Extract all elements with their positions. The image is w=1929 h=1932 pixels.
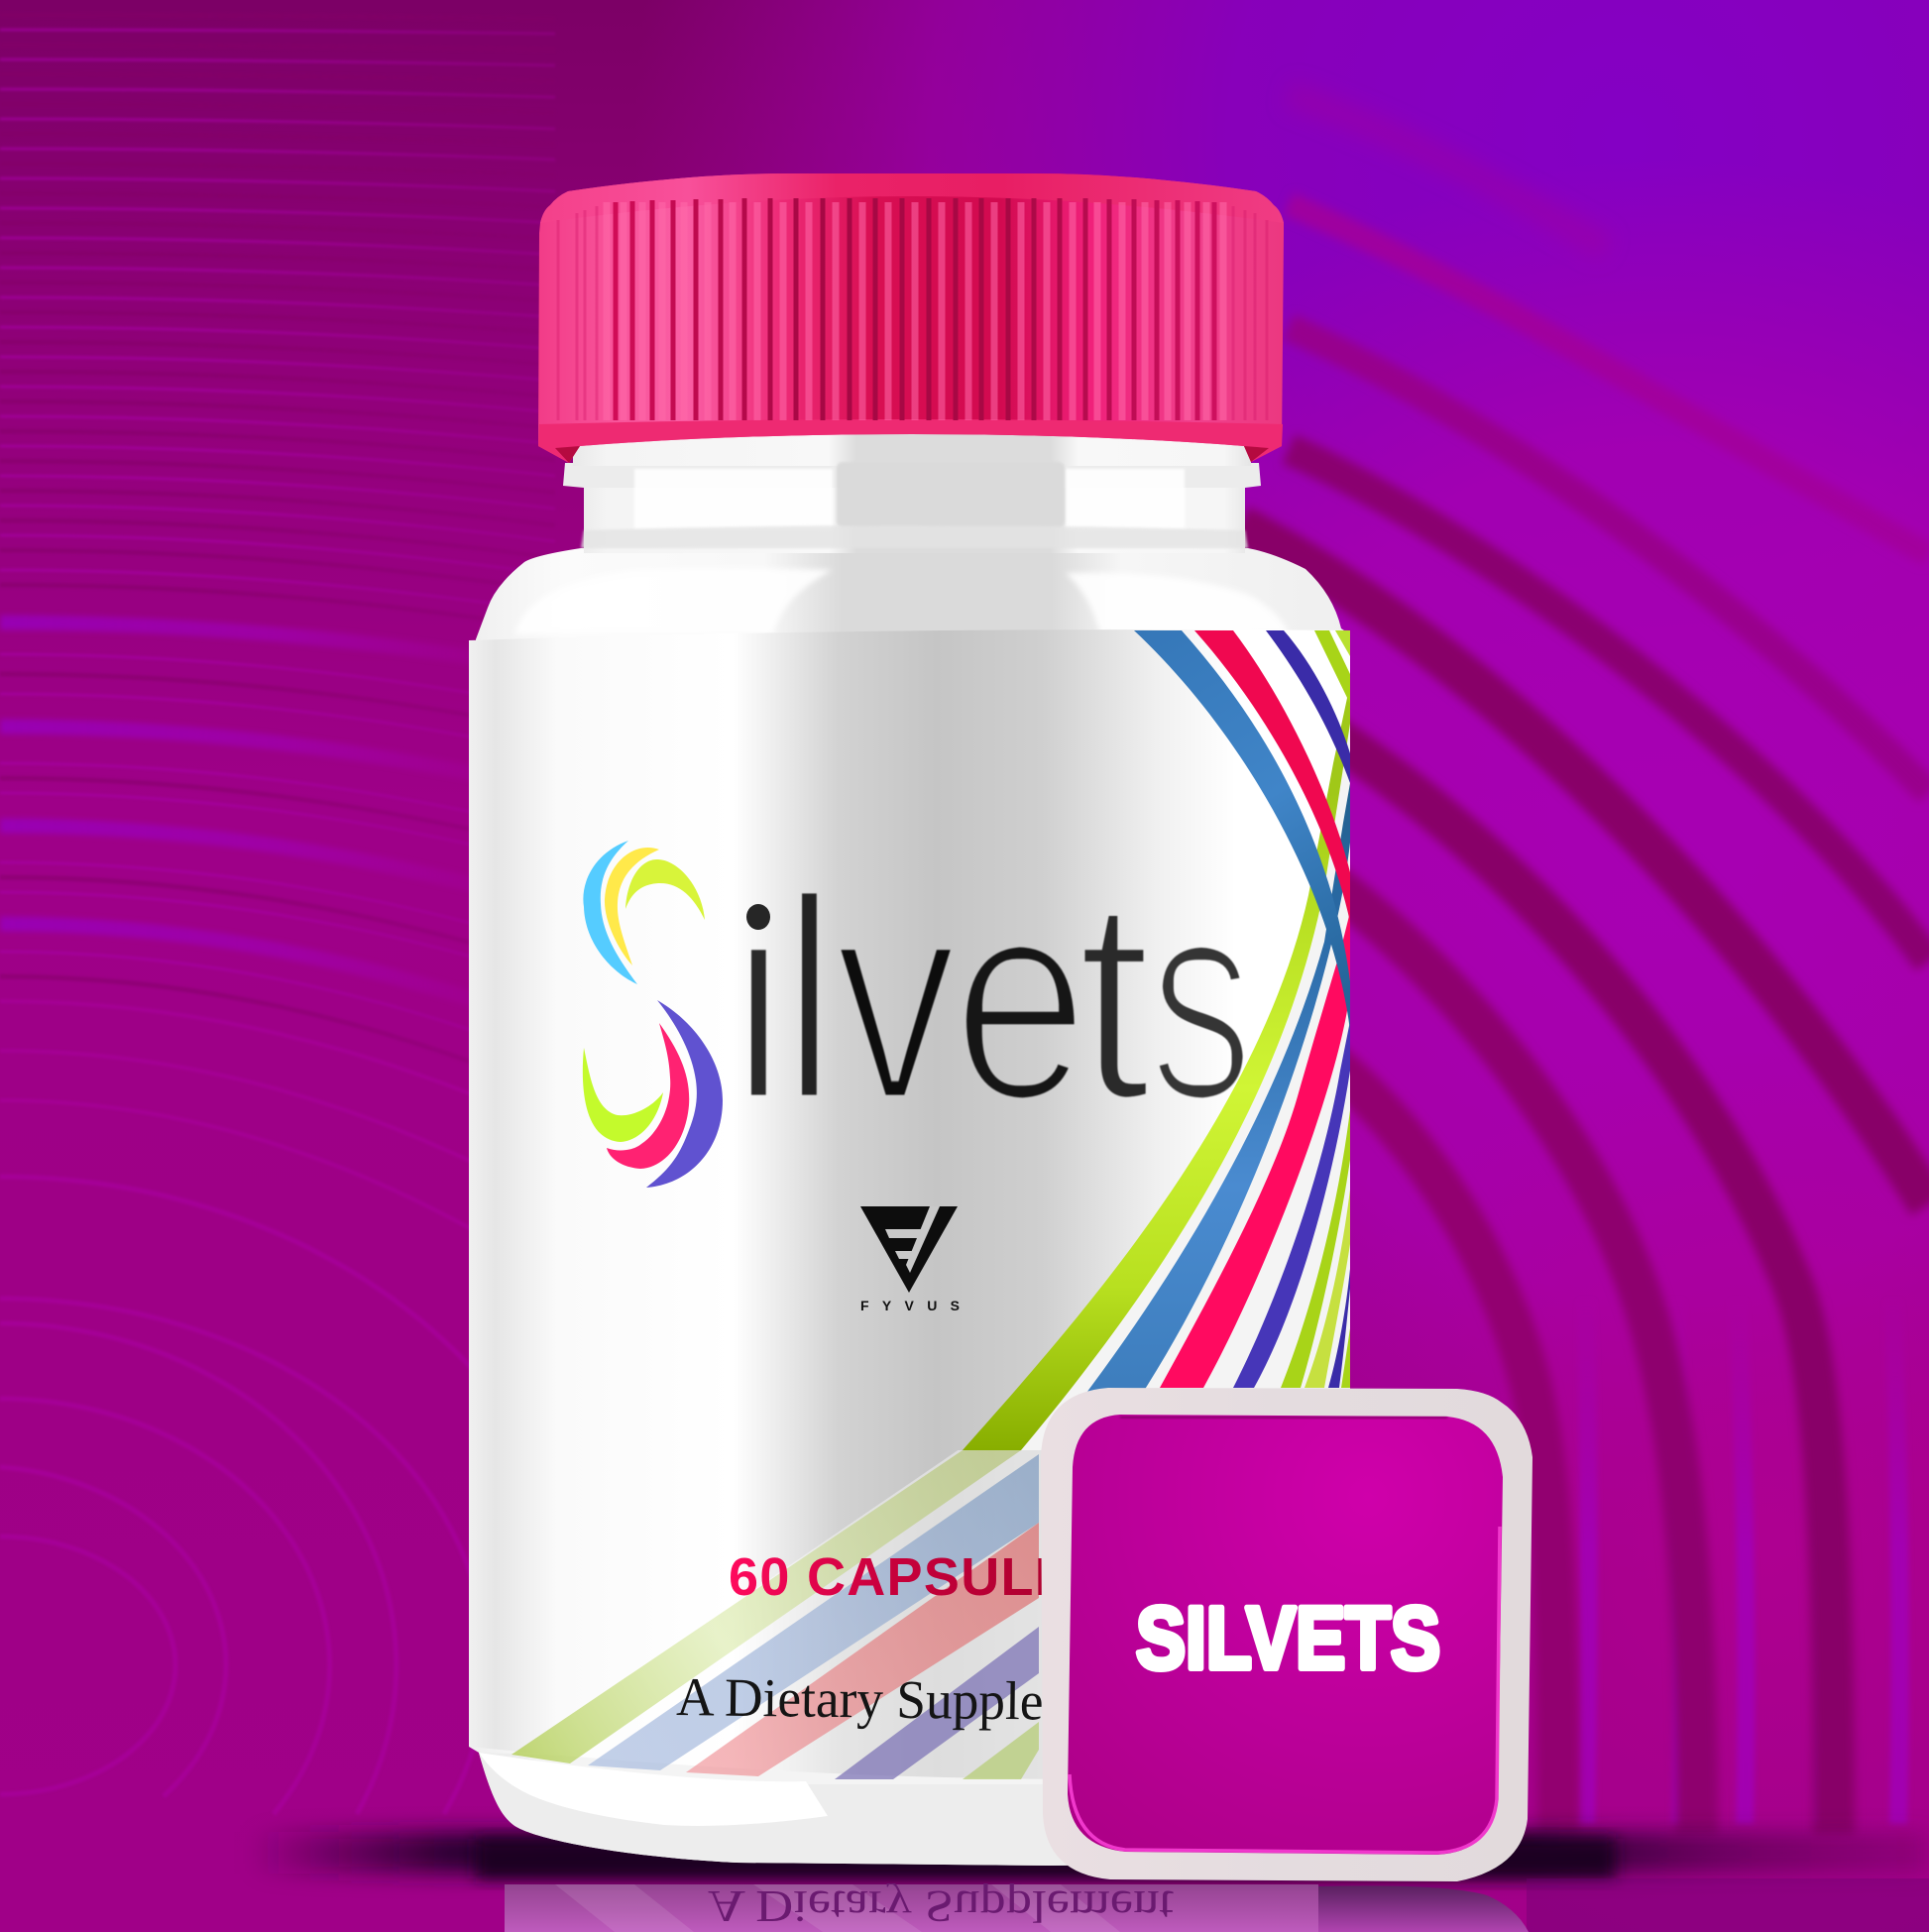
tray face [1068,1415,1503,1855]
cap ribs [558,198,1267,420]
brand name: l [782,839,837,1160]
brand logo: FYVUS [860,1206,960,1313]
brand name: t [1078,840,1152,1160]
shoulder highlights [515,569,1289,634]
brand name: v [835,839,957,1160]
tray card [1041,1388,1532,1881]
tray inner top shadow [1120,1417,1447,1419]
tray rim [1041,1388,1532,1881]
brand name: e [953,839,1088,1160]
bottle shoulder and body [469,548,1350,1866]
swoosh band rising right [963,684,1350,1454]
reflection of the bottle on the floor [505,1881,1529,1932]
bottle bottom shade [479,1753,1190,1866]
tray brand name: SILVETS [1136,1588,1440,1687]
reflected text: A Dietary Supplement [708,1881,1175,1931]
floor shadow [248,1832,1929,1932]
cap [538,173,1284,463]
left background stripes [0,15,594,1814]
brand logo: FYVUS: FYVUS [860,1298,960,1313]
bottle bottom highlight [479,1753,828,1826]
S logo mark [583,841,723,1188]
capsule count: 60 CAPSULES [729,1547,1108,1607]
round dot of the i [746,904,770,930]
bottle neck [563,434,1261,553]
product type: A Dietary Supplement [676,1666,1150,1733]
brand name [732,838,1254,1160]
brand name: i [732,839,786,1160]
faded diagonal stripes [511,1450,1043,1779]
bottle label [469,629,1350,1784]
dot cover [743,887,775,947]
bottle [469,173,1350,1866]
swoosh band falling right [1134,630,1350,1031]
brand name: s [1149,838,1254,1160]
tray face rim glow [1070,1527,1500,1853]
